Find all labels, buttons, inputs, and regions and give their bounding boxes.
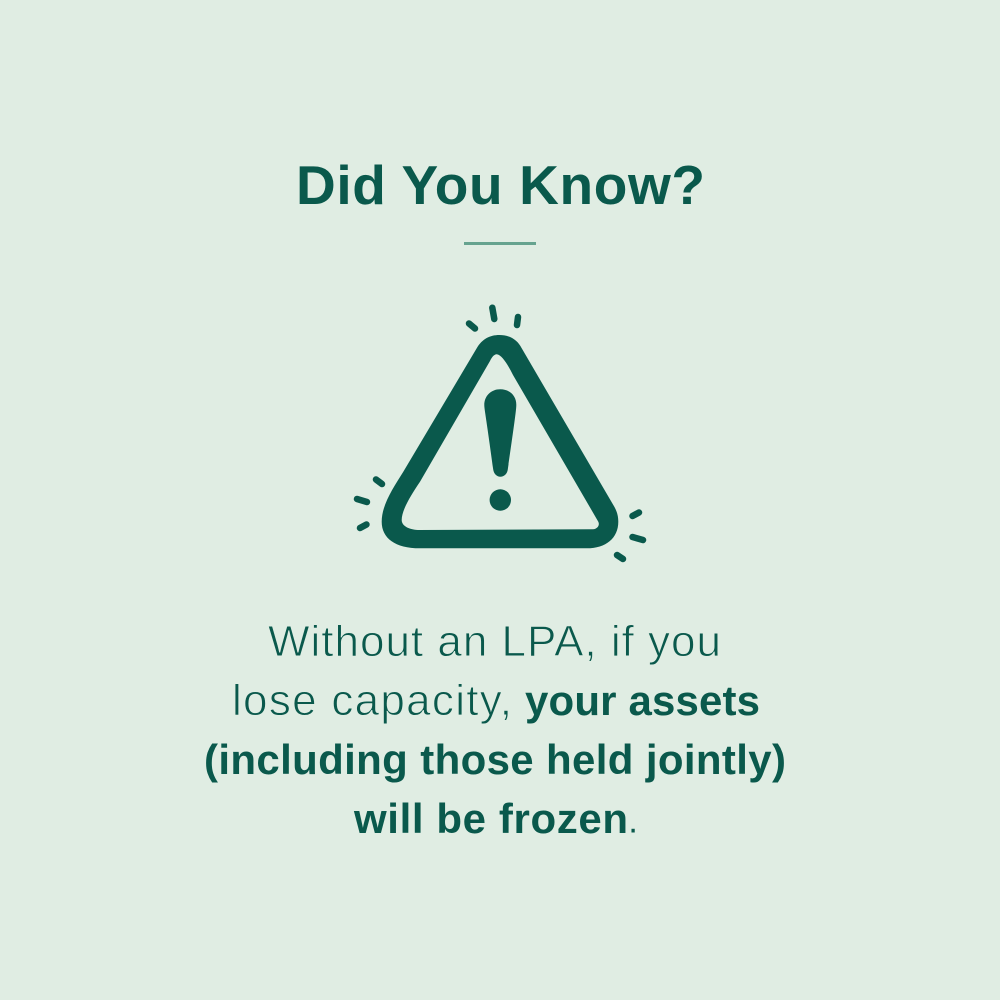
body text [204,617,786,843]
body text: lose capacity, [232,676,512,725]
body text: Without an LPA, if you [268,617,721,666]
exclamation mark [484,389,516,477]
spark lines [357,308,643,559]
body text: your assets [525,677,760,724]
triangle outline [382,335,618,548]
title underline [464,242,536,245]
body text: (including those held jointly) [204,736,786,783]
title: Did You Know? [296,154,705,216]
body text: . [627,794,639,843]
icon: warning triangle [357,308,643,559]
body text: will be frozen [353,795,628,842]
